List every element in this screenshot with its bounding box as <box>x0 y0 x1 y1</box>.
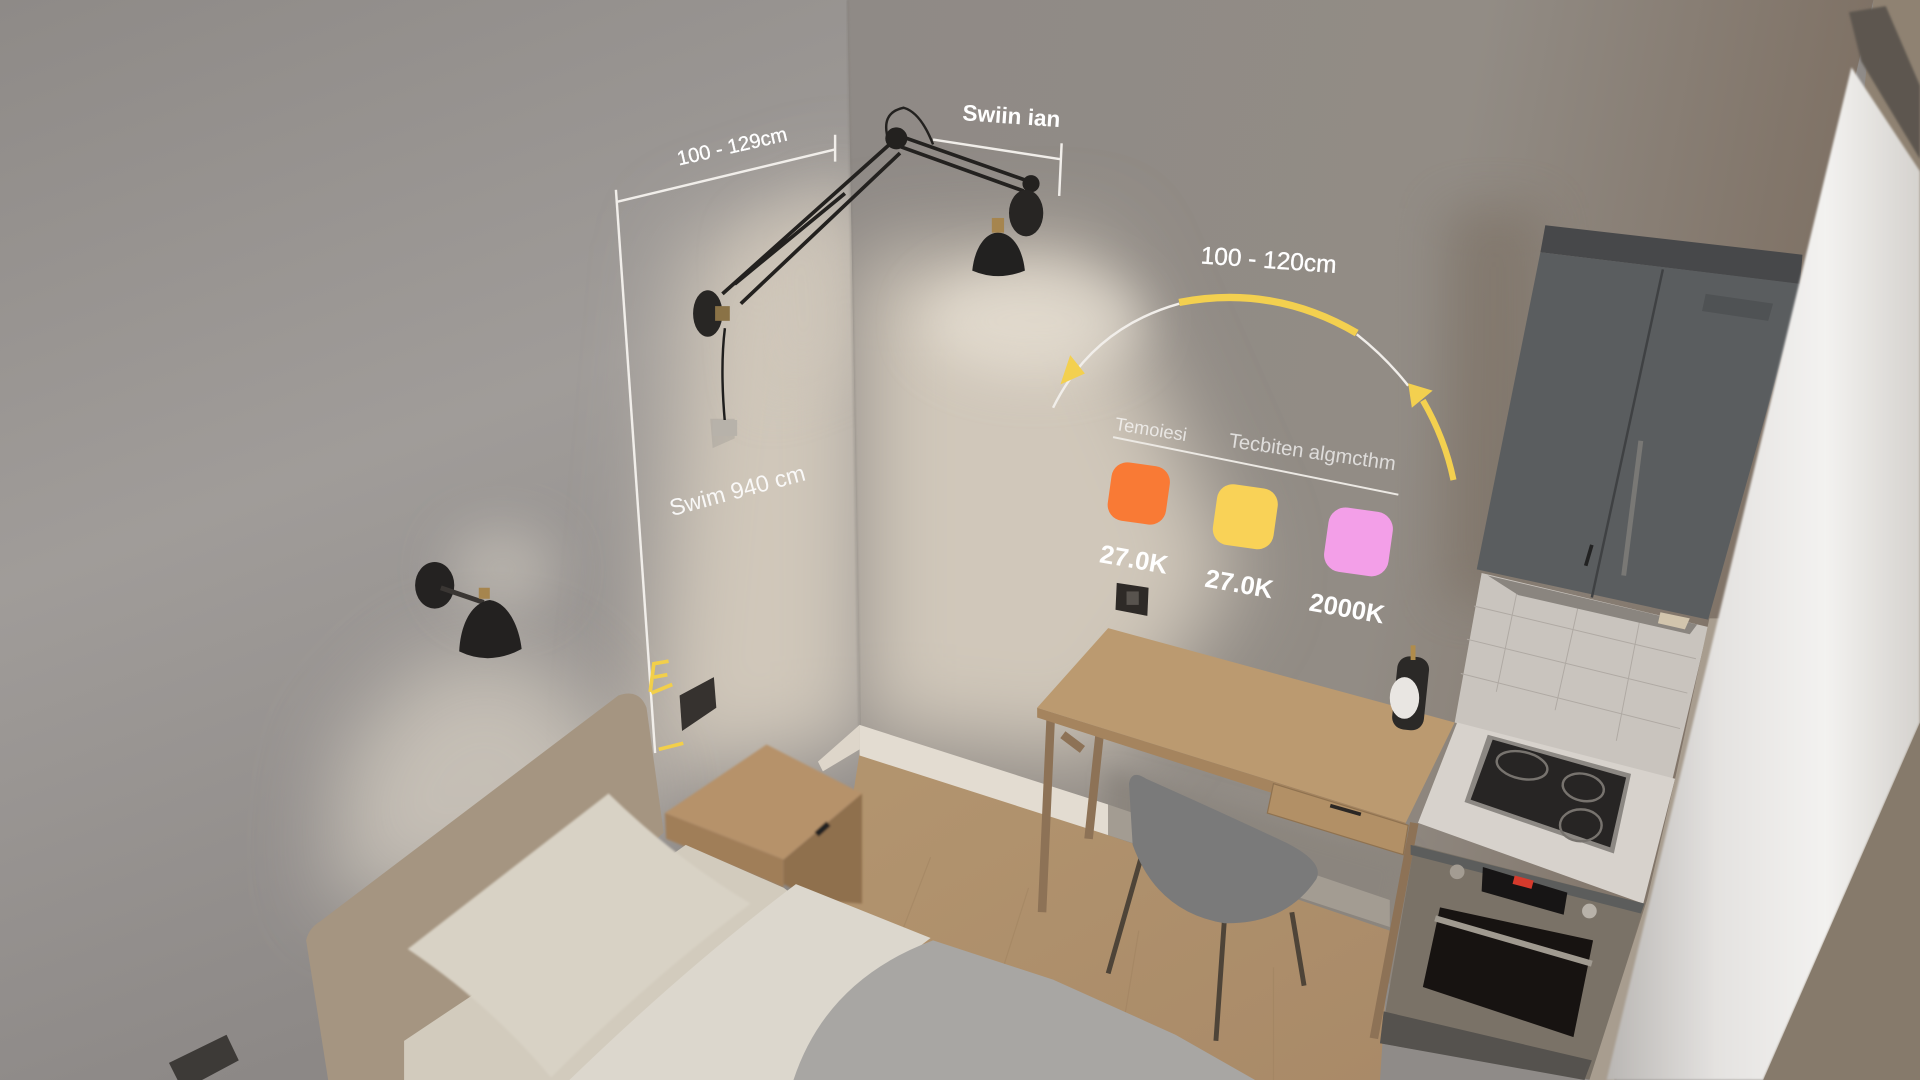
duvet <box>569 884 931 1080</box>
wall plate <box>693 290 722 337</box>
curtain <box>1607 67 1920 1080</box>
value: orange: 27.0K <box>1098 540 1170 580</box>
grey blanket <box>793 940 1255 1080</box>
pillow <box>408 793 751 1078</box>
colour temperature legend <box>1098 413 1398 630</box>
kitchen tile splashback <box>1455 573 1708 784</box>
dimension: swing <box>933 99 1062 196</box>
dimension: swing: Swiin ian <box>962 99 1061 132</box>
swing arc diagram <box>1053 242 1453 480</box>
swing arc diagram: 100 - 120cm <box>1200 242 1337 279</box>
socket bottom left <box>169 1035 239 1080</box>
desk <box>1037 628 1455 1038</box>
oven window <box>1423 907 1593 1037</box>
left wall <box>0 0 860 922</box>
desk ornament lamp <box>1390 645 1430 732</box>
oven plinth <box>1380 1011 1592 1080</box>
right side wall and curtain <box>1607 0 1920 1080</box>
value: yellow: 27.0K <box>1203 565 1276 604</box>
shade <box>972 233 1025 276</box>
swatch: yellow <box>1211 482 1280 551</box>
value: pink: 2000K <box>1307 589 1387 630</box>
oven display <box>1482 867 1567 915</box>
swatch: pink <box>1322 505 1395 579</box>
desk legs <box>1042 720 1414 1038</box>
upper arms <box>896 135 1029 191</box>
power cord and plug <box>722 328 725 422</box>
loop cable <box>886 108 933 144</box>
articulated swing arm lamp <box>693 108 1043 448</box>
end plate <box>1009 190 1043 236</box>
wall socket above desk <box>1116 583 1149 616</box>
nightstand <box>665 744 862 904</box>
mattress <box>404 845 857 1080</box>
dimension: arm reach: 100 - 129cm <box>675 124 789 170</box>
lower left wall lamp <box>415 562 522 658</box>
wall plate shadow <box>710 419 735 448</box>
legend headers: Tecbiten algmcthm <box>1227 430 1397 475</box>
wall corner shading <box>847 0 860 729</box>
legend headers <box>1114 413 1397 475</box>
yellow height marks <box>650 661 683 749</box>
legend headers: Temoiesi <box>1114 413 1189 445</box>
headboard <box>306 694 664 1080</box>
socket by bed <box>680 677 716 731</box>
countertop <box>1418 722 1675 904</box>
right arrowhead <box>1408 383 1433 408</box>
oven handle <box>1435 918 1592 964</box>
lower arms <box>722 138 900 304</box>
dimension: mounting height <box>616 190 808 753</box>
floor <box>808 753 1390 1080</box>
bed <box>306 694 1255 1080</box>
chair <box>1108 775 1318 1041</box>
left arrowhead <box>1060 355 1085 384</box>
oven <box>1380 845 1644 1080</box>
baseboards <box>818 725 1390 927</box>
right wall <box>845 0 1873 1080</box>
induction hob <box>1464 735 1631 853</box>
desk top <box>1037 628 1455 823</box>
dimension: arm reach <box>616 124 835 202</box>
dimension: mounting height: Swim 940 cm <box>667 460 808 521</box>
kitchen side panel <box>1589 618 1724 1080</box>
wall cabinet <box>1477 225 1802 634</box>
desk drawer <box>1267 784 1408 855</box>
swatch: orange <box>1106 460 1172 527</box>
